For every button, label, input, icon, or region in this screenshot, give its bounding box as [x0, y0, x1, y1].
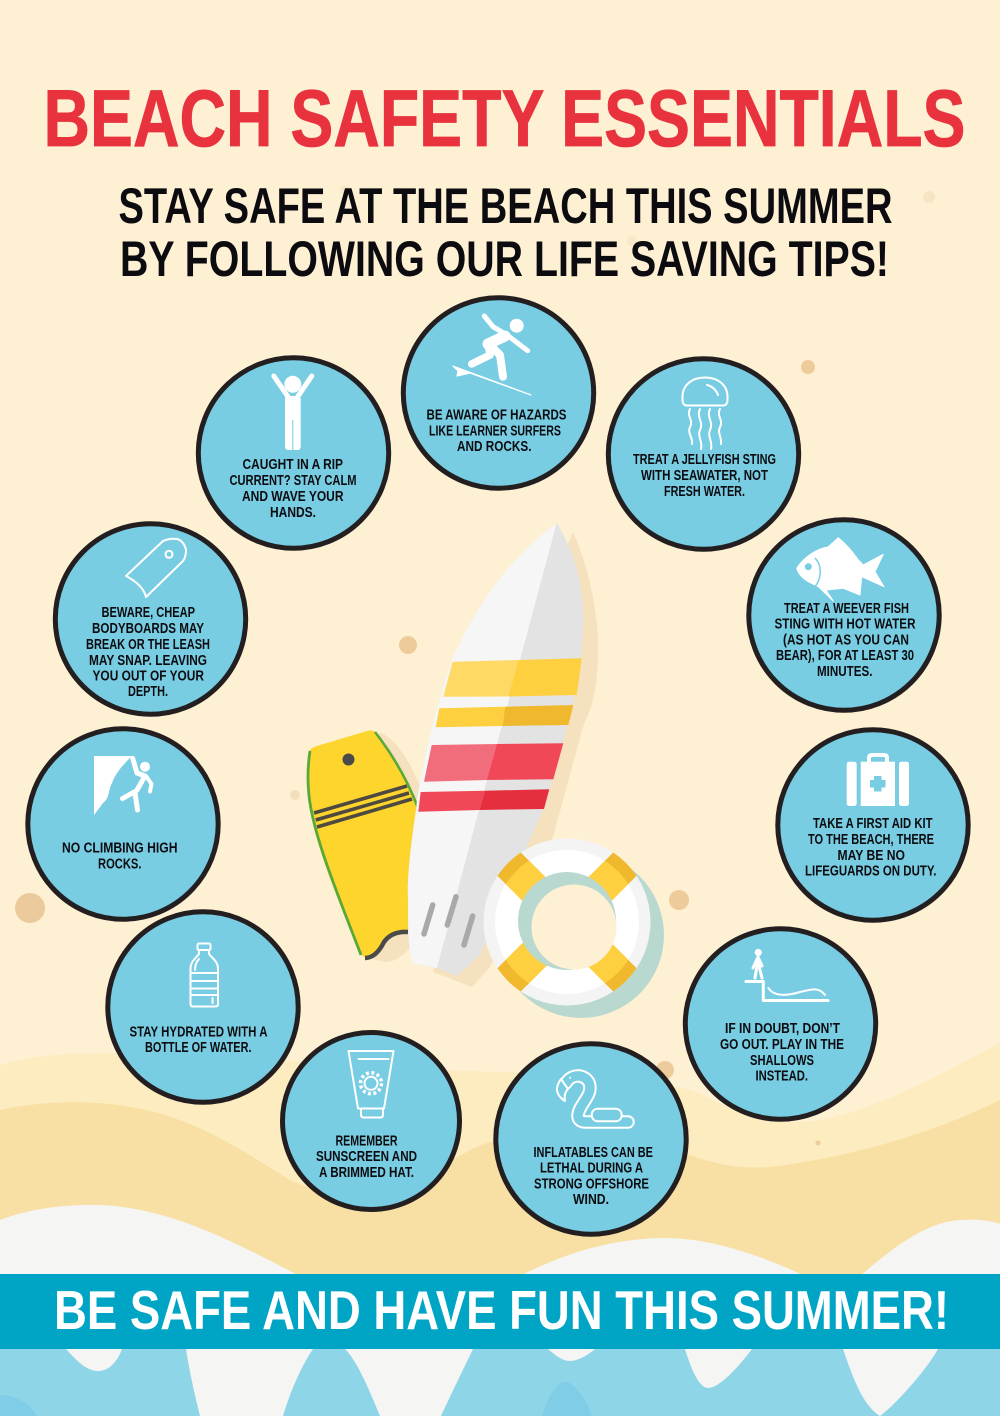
panel: inflatables — [496, 1044, 686, 1234]
subtitle — [118, 178, 892, 287]
text: bodyboard tip: BREAK OR THE LEASH — [86, 637, 210, 653]
text: if in doubt tip: IF IN DOUBT, DON’T — [725, 1021, 840, 1037]
icon: person above shallows — [746, 949, 828, 1000]
text: bodyboard tip: BEWARE, CHEAP — [102, 605, 195, 621]
text: sunscreen tip: REMEMBER — [336, 1134, 398, 1150]
icon: fish — [797, 538, 884, 601]
text: inflatables tip: INFLATABLES CAN BE — [534, 1145, 653, 1161]
text: bodyboard tip: MAY SNAP. LEAVING — [89, 653, 207, 669]
sand speckles — [15, 185, 935, 1146]
text: first aid tip: MAY BE NO — [838, 848, 905, 864]
text: rip current tip: AND WAVE YOUR — [242, 489, 344, 505]
text: first aid tip: LIFEGUARDS ON DUTY. — [805, 864, 936, 880]
icon: surfer — [453, 316, 531, 395]
text: sunscreen tip: A BRIMMED HAT. — [319, 1165, 414, 1181]
background: sand waves and water — [0, 1043, 1000, 1416]
text: inflatables tip: WIND. — [573, 1192, 609, 1208]
surfboard — [408, 523, 598, 987]
text: rip current tip: CAUGHT IN A RIP — [242, 457, 343, 473]
text: climbing tip: NO CLIMBING HIGH — [62, 841, 178, 857]
panel: if in doubt — [685, 929, 876, 1119]
text: climbing tip — [62, 841, 178, 873]
text: hydration tip: STAY HYDRATED WITH A — [130, 1025, 268, 1041]
icon: person waving — [274, 376, 312, 450]
text: fish tip: MINUTES. — [817, 664, 872, 680]
icon: sunscreen tube — [348, 1051, 394, 1118]
text: if in doubt tip — [720, 1021, 844, 1085]
panel: weever fish — [749, 520, 939, 710]
text: if in doubt tip: GO OUT. PLAY IN THE — [720, 1037, 844, 1053]
text: bodyboard tip: BODYBOARDS MAY — [92, 621, 204, 637]
text: hazards tip: AND ROCKS. — [457, 439, 532, 455]
panel: hydration — [108, 912, 298, 1102]
panel: surfer hazards — [403, 298, 594, 488]
text: bodyboard tip: DEPTH. — [128, 684, 168, 700]
text: inflatables tip — [534, 1145, 653, 1208]
icon: bodyboard outline — [126, 539, 186, 597]
text: fish tip: (AS HOT AS YOU CAN — [783, 633, 909, 649]
text: bodyboard tip: YOU OUT OF YOUR — [92, 669, 204, 685]
text: first aid tip — [805, 816, 936, 880]
text: bodyboard tip — [86, 605, 210, 700]
text: inflatables tip: STRONG OFFSHORE — [534, 1177, 649, 1193]
panel: climbing — [28, 729, 218, 919]
text: first aid tip: TO THE BEACH, THERE — [808, 832, 934, 848]
text: hazards tip: LIKE LEARNER SURFERS — [429, 424, 561, 440]
text: fish tip — [774, 601, 916, 680]
icon: climber on rock — [94, 756, 152, 815]
icon: jellyfish — [682, 378, 728, 449]
icon: water bottle — [190, 944, 218, 1006]
panel: first aid — [778, 730, 968, 920]
text: fish tip: STING WITH HOT WATER — [774, 617, 916, 633]
text: sunscreen tip — [316, 1134, 417, 1181]
text: sunscreen tip: SUNSCREEN AND — [316, 1149, 417, 1165]
text: first aid tip: TAKE A FIRST AID KIT — [813, 816, 933, 832]
text: rip current tip — [230, 457, 356, 521]
panel: jellyfish — [608, 359, 799, 549]
text: hydration tip — [130, 1024, 268, 1056]
text: jellyfish tip: WITH SEAWATER, NOT — [641, 468, 768, 484]
text: hazards tip: BE AWARE OF HAZARDS — [426, 408, 567, 424]
text: climbing tip: ROCKS. — [98, 857, 142, 873]
text: jellyfish tip: FRESH WATER. — [664, 484, 745, 500]
panel: rip current — [198, 358, 389, 548]
text: jellyfish tip — [633, 452, 776, 500]
text: rip current tip: HANDS. — [270, 505, 316, 521]
central illustration: bodyboard, surfboard, life ring — [306, 523, 664, 1018]
icon: first aid kit — [847, 755, 909, 806]
bodyboard — [308, 730, 425, 962]
text: inflatables tip: LETHAL DURING A — [540, 1161, 643, 1177]
panel: sunscreen — [282, 1032, 460, 1210]
life ring — [484, 838, 664, 1018]
text: fish tip: BEAR), FOR AT LEAST 30 — [776, 648, 914, 664]
text: rip current tip: CURRENT? STAY CALM — [230, 473, 356, 489]
text: hazards tip — [426, 408, 567, 455]
text: if in doubt tip: INSTEAD. — [756, 1069, 808, 1085]
text: fish tip: TREAT A WEEVER FISH — [784, 601, 909, 617]
text: hydration tip: BOTTLE OF WATER. — [145, 1040, 252, 1056]
text: jellyfish tip: TREAT A JELLYFISH STING — [633, 452, 776, 468]
panel: bodyboards — [55, 524, 246, 714]
icon: flamingo inflatable — [557, 1076, 628, 1122]
text: if in doubt tip: SHALLOWS — [750, 1053, 814, 1069]
